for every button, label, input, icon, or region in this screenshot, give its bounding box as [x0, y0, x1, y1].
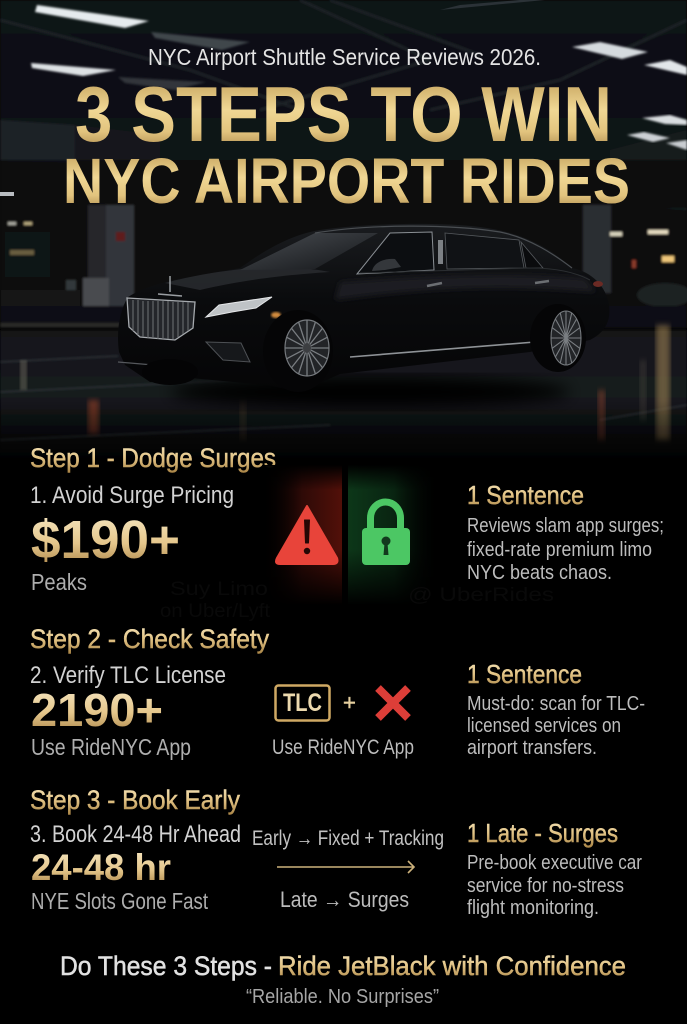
- icon caption: Use RideNYC App: [272, 736, 414, 759]
- photo: parking garage background: [0, 0, 687, 475]
- car tail light: [593, 281, 603, 287]
- step 2 subheading: 2. Verify TLC License: [30, 662, 226, 689]
- step 3 big number: 24-48 hr: [31, 847, 171, 888]
- car headlight: [206, 297, 272, 317]
- step 1 sentence text: fixed-rate premium limo: [467, 539, 652, 561]
- faint ghost labels: on Uber/Lyft: [160, 601, 271, 622]
- car sill chrome: [350, 342, 535, 357]
- car windshield: [240, 233, 378, 270]
- footer quote: “Reliable. No Surprises”: [246, 986, 439, 1008]
- red glow panel: [262, 465, 342, 605]
- main title: [63, 70, 630, 217]
- icon: red cross: [378, 688, 408, 718]
- footer call to action: [60, 951, 626, 981]
- icon: green padlock: [362, 502, 410, 565]
- step 1 sentence text: NYC beats chaos.: [467, 562, 612, 584]
- step 3 caption: NYE Slots Gone Fast: [31, 888, 208, 914]
- step 1 heading: Step 1 - Dodge Surges: [30, 443, 276, 473]
- step 1 subheading: 1. Avoid Surge Pricing: [30, 482, 234, 509]
- step 2 sentence text: [467, 693, 645, 759]
- car far front wheel: [142, 359, 198, 385]
- early label: Early → Fixed + Tracking: [252, 827, 444, 850]
- car hood highlights: [165, 267, 330, 290]
- faint ghost labels: Suy Limo: [170, 579, 268, 600]
- footer call to action: Ride JetBlack with Confidence: [278, 951, 626, 981]
- step 3 sentence text: service for no-stress: [467, 875, 624, 897]
- header subtitle: NYC Airport Shuttle Service Reviews 2026.: [148, 44, 541, 70]
- icon: TLC badge: [276, 686, 330, 720]
- step 3 subheading: 3. Book 24-48 Hr Ahead: [30, 821, 241, 848]
- step 2 sentence text: Must-do: scan for TLC-: [467, 693, 645, 715]
- step 1 caption: Peaks: [31, 569, 87, 595]
- step 2 big number: 2190+: [31, 684, 163, 736]
- car door handles: [427, 281, 549, 286]
- step 1 sentence heading: 1 Sentence: [467, 480, 584, 510]
- step 2 sentence text: licensed services on: [467, 715, 621, 737]
- car body: [118, 224, 609, 392]
- car front wheel: [263, 310, 333, 392]
- step 3 sentence text: flight monitoring.: [467, 897, 599, 919]
- faint ghost labels: @ UberRides: [408, 585, 554, 606]
- ceiling lights: [0, 0, 687, 196]
- step 3 sentence text: Pre-book executive car: [467, 852, 642, 874]
- car rear wheel: [530, 304, 586, 372]
- late label: Late → Surges: [280, 887, 409, 912]
- icon: TLC badge: TLC: [283, 689, 322, 717]
- car side windows: [315, 226, 572, 274]
- arrow: [277, 861, 414, 873]
- car grille: [127, 298, 195, 340]
- car mirror: [372, 259, 401, 271]
- step 3 sentence text: [467, 852, 642, 919]
- footer call to action: Do These 3 Steps -: [60, 951, 272, 981]
- icon: red warning triangle: [276, 506, 338, 564]
- step 3 sentence heading: 1 Late - Surges: [467, 818, 618, 848]
- plus sign: +: [343, 690, 356, 715]
- main title: 3 STEPS TO WIN: [75, 70, 612, 158]
- panel: step 1 dodge surges: [30, 443, 664, 622]
- limousine car illustration: [118, 224, 609, 392]
- faint ghost labels: [160, 579, 554, 622]
- step 1 big number: $190+: [31, 510, 180, 570]
- step 2 caption: Use RideNYC App: [31, 734, 191, 760]
- car amber light: [271, 312, 281, 318]
- panel: step 2 check safety: [30, 624, 645, 760]
- panel: step 3 book early: [30, 785, 642, 919]
- step 1 sentence text: [467, 515, 664, 584]
- car hood ornament: [158, 276, 182, 296]
- step 2 sentence heading: 1 Sentence: [467, 659, 582, 689]
- green glow panel: [348, 465, 440, 605]
- car air intake: [206, 342, 250, 362]
- step 2 heading: Step 2 - Check Safety: [30, 624, 269, 654]
- step 3 heading: Step 3 - Book Early: [30, 785, 240, 815]
- step 2 sentence text: airport transfers.: [467, 737, 597, 759]
- car shoulder reflection: [335, 275, 596, 300]
